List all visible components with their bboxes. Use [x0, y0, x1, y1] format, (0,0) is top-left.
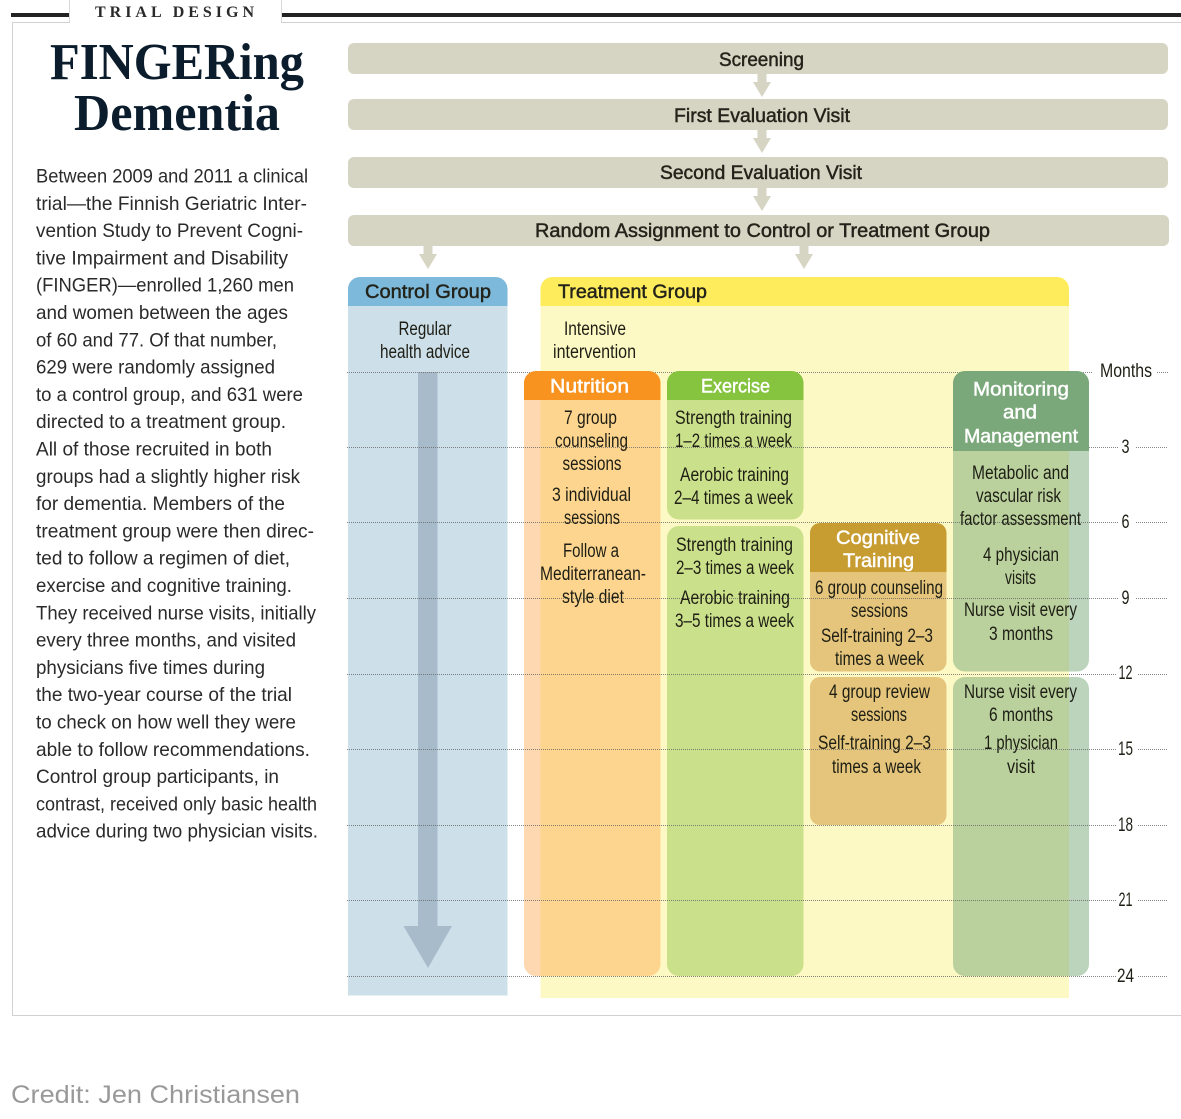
exercise content: Exercise — [701, 376, 770, 398]
timeline axis labels: months: 18 — [1118, 815, 1133, 836]
text block: description: advice during two physician visits. — [36, 821, 318, 843]
monitoring and management content: factor assessment — [960, 509, 1082, 530]
section label: trial design: TRIAL DESIGN — [95, 4, 254, 21]
text block: description: ted to follow a regimen of diet, — [36, 548, 290, 570]
flow step: first evaluation visit: First Evaluation Visit — [674, 106, 851, 127]
text block: description: directed to a treatment group. — [36, 411, 286, 433]
nutrition content: 3 individual — [552, 485, 631, 506]
monitoring and management content: Management — [964, 426, 1079, 448]
exercise content: Strength training — [675, 408, 792, 429]
monitoring and management content: 6 months — [989, 705, 1053, 726]
flow step: second evaluation visit: Second Evaluation Visit — [660, 163, 863, 184]
monitoring and management content: and — [1003, 402, 1037, 424]
nutrition content: Mediterranean- — [540, 564, 646, 585]
nutrition content: sessions — [564, 508, 620, 529]
column: monitoring background — [953, 380, 1089, 976]
exercise content: Strength training — [676, 535, 793, 556]
flow step: random assignment: Random Assignment to Control or Treatment Group — [535, 221, 990, 242]
text block: description: Control group participants, in — [36, 766, 279, 788]
arrow: control group timeline — [404, 372, 452, 968]
panel: control group: health advice — [380, 342, 470, 363]
cognitive training content: Cognitive — [836, 528, 920, 549]
text block: description: to check on how well they were — [36, 712, 296, 734]
exercise content: Aerobic training — [680, 588, 790, 609]
exercise content: Aerobic training — [680, 465, 789, 486]
monitoring and management content: visits — [1005, 568, 1036, 589]
text block: description: tive Impairment and Disability — [36, 247, 288, 269]
text block: description: (FINGER)—enrolled 1,260 men — [36, 275, 294, 297]
panel: control group: Control Group — [365, 282, 491, 303]
text block: description: the two-year course of the trial — [36, 684, 292, 706]
monitoring and management content: 4 physician — [983, 545, 1059, 566]
timeline axis labels: months: 21 — [1118, 890, 1132, 911]
nutrition content: sessions — [562, 454, 622, 475]
text block: description: able to follow recommendations. — [36, 739, 310, 761]
column: cognitive training background — [810, 530, 946, 825]
title — [50, 34, 304, 142]
monitoring and management content: Nurse visit every — [964, 682, 1077, 703]
text block: description: groups had a slightly higher risk — [36, 466, 300, 488]
cognitive training content: times a week — [832, 757, 921, 778]
exercise content: 3–5 times a week — [675, 611, 794, 632]
monitoring and management content: vascular risk — [976, 486, 1061, 507]
monitoring and management content: Nurse visit every — [964, 600, 1077, 621]
cognitive training content: 6 group counseling — [815, 578, 943, 599]
title: FINGERing — [50, 34, 304, 91]
panel: treatment group: intervention — [553, 342, 636, 363]
text block: description: every three months, and visited — [36, 630, 296, 652]
panel: treatment group: Treatment Group — [558, 282, 707, 303]
arrow: screening to first evaluation — [753, 74, 771, 97]
column: nutrition background — [524, 372, 660, 976]
timeline axis labels: months: 3 — [1122, 437, 1130, 458]
cognitive training content: times a week — [835, 649, 924, 670]
timeline axis labels: months — [1100, 361, 1152, 987]
text block: description: vention Study to Prevent Cogni- — [36, 220, 303, 242]
timeline axis labels: months: 6 — [1122, 512, 1130, 533]
monitoring and management content: 3 months — [989, 624, 1053, 645]
timeline axis labels: months: 24 — [1117, 966, 1134, 987]
exercise content: 2–3 times a week — [676, 558, 794, 579]
cognitive training content: Self-training 2–3 — [818, 733, 931, 754]
timeline axis labels: months: 12 — [1118, 663, 1132, 684]
nutrition content: Nutrition — [550, 376, 629, 398]
monitoring and management content: Monitoring — [973, 380, 1069, 400]
text block: description: 629 were randomly assigned — [36, 357, 275, 379]
text block: description: treatment group were then direc- — [36, 520, 314, 542]
text block: description: They received nurse visits, initially — [36, 602, 316, 624]
nutrition content: style diet — [562, 587, 625, 608]
text block: description: All of those recruited in both — [36, 438, 272, 460]
text block: description: and women between the ages — [36, 302, 288, 324]
text block: description: for dementia. Members of the — [36, 493, 285, 515]
monitoring and management content: 1 physician — [984, 733, 1058, 754]
text block: description: physicians five times during — [36, 657, 265, 679]
credit: Credit: Jen Christiansen — [11, 1081, 300, 1109]
arrow: first to second evaluation — [753, 130, 771, 153]
panel: control group — [348, 277, 508, 996]
flow step: second evaluation visit — [348, 157, 1168, 188]
arrow: to control group — [419, 246, 437, 269]
flow step: screening — [348, 43, 1168, 74]
monitoring and management content: visit — [1007, 757, 1036, 778]
text block: description: trial—the Finnish Geriatric Inter- — [36, 193, 307, 215]
cognitive training content: Training — [843, 551, 914, 572]
cognitive training content: 4 group review — [829, 682, 930, 703]
column: exercise background — [667, 380, 804, 976]
exercise content: 2–4 times a week — [674, 488, 793, 509]
monitoring and management content — [953, 371, 1089, 778]
monitoring and management content: Metabolic and — [972, 463, 1069, 484]
text block: description: contrast, received only basic health — [36, 793, 317, 815]
text block: description: exercise and cognitive training. — [36, 575, 292, 597]
flow step: random assignment — [348, 215, 1169, 246]
timeline axis labels: months: 9 — [1122, 588, 1130, 609]
cognitive training content: sessions — [851, 601, 908, 622]
text block: description — [36, 166, 318, 843]
panel: control group: Regular — [398, 319, 452, 340]
panel: treatment group — [540, 277, 1069, 998]
text block: description: to a control group, and 631 were — [36, 384, 303, 406]
text block: description: Between 2009 and 2011 a clinical — [36, 166, 308, 188]
exercise content — [667, 371, 804, 632]
nutrition content: Follow a — [563, 541, 619, 562]
arrow: to treatment group — [795, 246, 813, 269]
nutrition content: 7 group — [564, 408, 617, 429]
flow step: first evaluation visit — [348, 99, 1168, 130]
title: Dementia — [74, 85, 280, 142]
nutrition content: counseling — [555, 431, 628, 452]
timeline axis labels: months: 15 — [1118, 739, 1133, 760]
cognitive training content: sessions — [851, 705, 907, 726]
text block: description: of 60 and 77. Of that number, — [36, 329, 277, 351]
arrow: second evaluation to assignment — [753, 188, 771, 211]
flow step: screening: Screening — [719, 50, 804, 71]
cognitive training content: Self-training 2–3 — [821, 626, 933, 647]
nutrition content — [524, 371, 660, 608]
panel: treatment group: Intensive — [564, 319, 626, 340]
timeline axis labels: months: Months — [1100, 361, 1152, 382]
cognitive training content — [810, 523, 946, 778]
month grid lines — [347, 372, 1168, 976]
exercise content: 1–2 times a week — [675, 431, 792, 452]
